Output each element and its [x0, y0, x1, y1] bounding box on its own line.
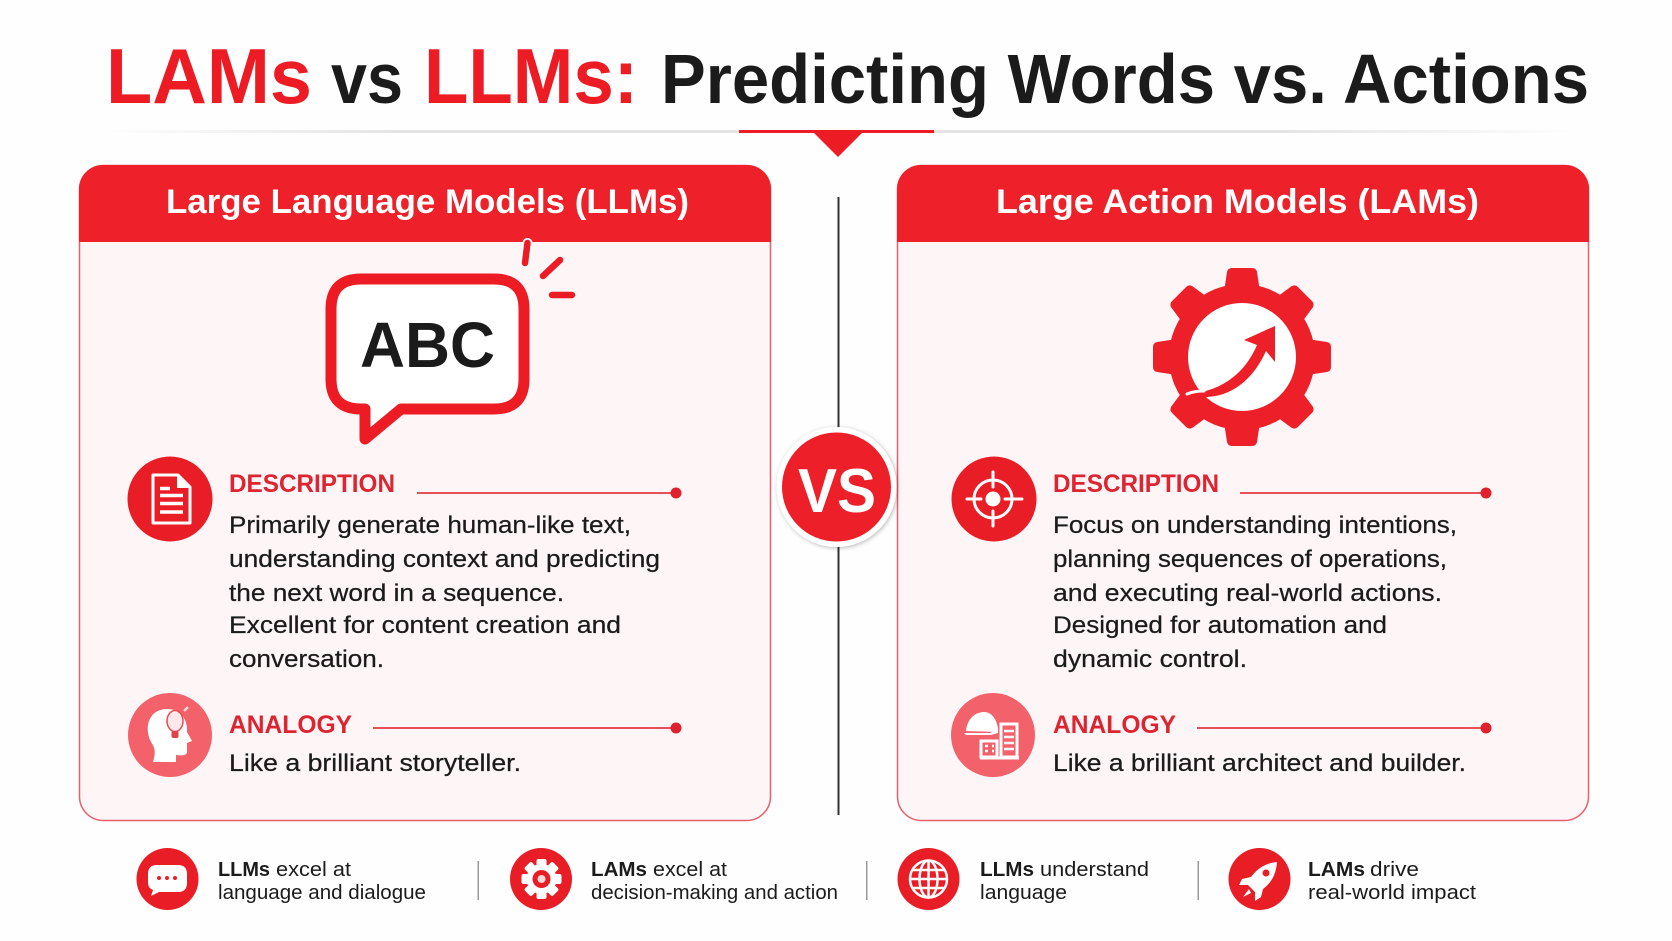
description text: planning sequences of operations, [1053, 546, 1447, 573]
takeaway text [218, 859, 426, 904]
panel header [79, 165, 771, 242]
description heading [1053, 470, 1492, 498]
analogy block [128, 693, 682, 777]
takeaway text [591, 859, 838, 904]
takeaway text: language [980, 882, 1067, 904]
title: LLMs: [424, 32, 638, 120]
takeaway text: LLMs [218, 859, 270, 881]
VS badge: VS [798, 457, 876, 526]
icon: ABC speech bubble [331, 243, 572, 439]
central divider [838, 197, 840, 815]
title: vs [331, 40, 403, 119]
takeaway text: decision-making and action [591, 882, 838, 904]
icon: rocket [1228, 848, 1290, 910]
bottom takeaways strip [136, 848, 1476, 910]
takeaway: LLMs language and dialogue [136, 848, 426, 910]
description heading: DESCRIPTION [229, 470, 395, 498]
takeaway text: LAMs [1308, 859, 1365, 881]
analogy heading [1053, 711, 1492, 739]
description block [952, 456, 1492, 673]
description text: understanding context and predicting [229, 546, 660, 573]
description text: Designed for automation and [1053, 612, 1387, 639]
title [106, 32, 1589, 120]
analogy text: Like a brilliant architect and builder. [1053, 750, 1466, 777]
description text: Excellent for content creation and [229, 612, 621, 639]
takeaway text: drive [1370, 859, 1419, 881]
panel: LLMs [79, 165, 771, 820]
analogy text: Like a brilliant storyteller. [229, 750, 521, 777]
icon: gear with rising arrow [1153, 268, 1331, 446]
takeaway text: excel at [653, 859, 727, 881]
analogy heading [229, 711, 682, 739]
description text: dynamic control. [1053, 646, 1247, 673]
VS badge [776, 427, 896, 547]
takeaway text [1308, 859, 1476, 904]
icon: head with light bulb [128, 693, 212, 777]
title: LAMs [106, 32, 312, 120]
panel header: Large Action Models (LAMs) [996, 183, 1479, 221]
panel header: Large Language Models (LLMs) [166, 183, 689, 221]
panel body [898, 166, 1588, 820]
takeaway: LAMs real-world impact [1228, 848, 1476, 910]
takeaway text: real-world impact [1308, 882, 1476, 904]
icon: document [128, 456, 212, 542]
panel: LAMs [897, 165, 1589, 820]
takeaway: LLMs understand language [898, 848, 1149, 910]
panel body [80, 166, 770, 820]
analogy heading: ANALOGY [229, 711, 352, 739]
icon: ABC speech bubble: ABC [360, 309, 495, 381]
takeaway: LAMs decision-making [510, 848, 838, 910]
takeaway text: understand [1040, 859, 1149, 881]
description text: the next word in a sequence. [229, 580, 564, 607]
description block [128, 456, 682, 673]
takeaway text: language and dialogue [218, 882, 426, 904]
title rule with pointer [100, 130, 1580, 157]
description text: conversation. [229, 646, 384, 673]
description heading: DESCRIPTION [1053, 470, 1219, 498]
icon: target [952, 456, 1036, 542]
description text [1053, 512, 1457, 673]
icon: chat bubble [136, 848, 198, 910]
description heading [229, 470, 682, 498]
takeaway text [980, 859, 1149, 904]
analogy block [951, 693, 1492, 777]
analogy heading: ANALOGY [1053, 711, 1176, 739]
icon: hard hat and building [951, 693, 1035, 777]
takeaway text: LAMs [591, 859, 647, 881]
takeaway text: excel at [276, 859, 351, 881]
panel header [897, 165, 1589, 242]
description text: Focus on understanding intentions, [1053, 512, 1457, 539]
description text: Primarily generate human-like text, [229, 512, 631, 539]
description text: and executing real-world actions. [1053, 580, 1442, 607]
icon: globe [898, 848, 960, 910]
description text [229, 512, 660, 673]
takeaway text: LLMs [980, 859, 1034, 881]
icon: gear [510, 848, 572, 910]
title: Predicting Words vs. Actions [661, 40, 1589, 118]
